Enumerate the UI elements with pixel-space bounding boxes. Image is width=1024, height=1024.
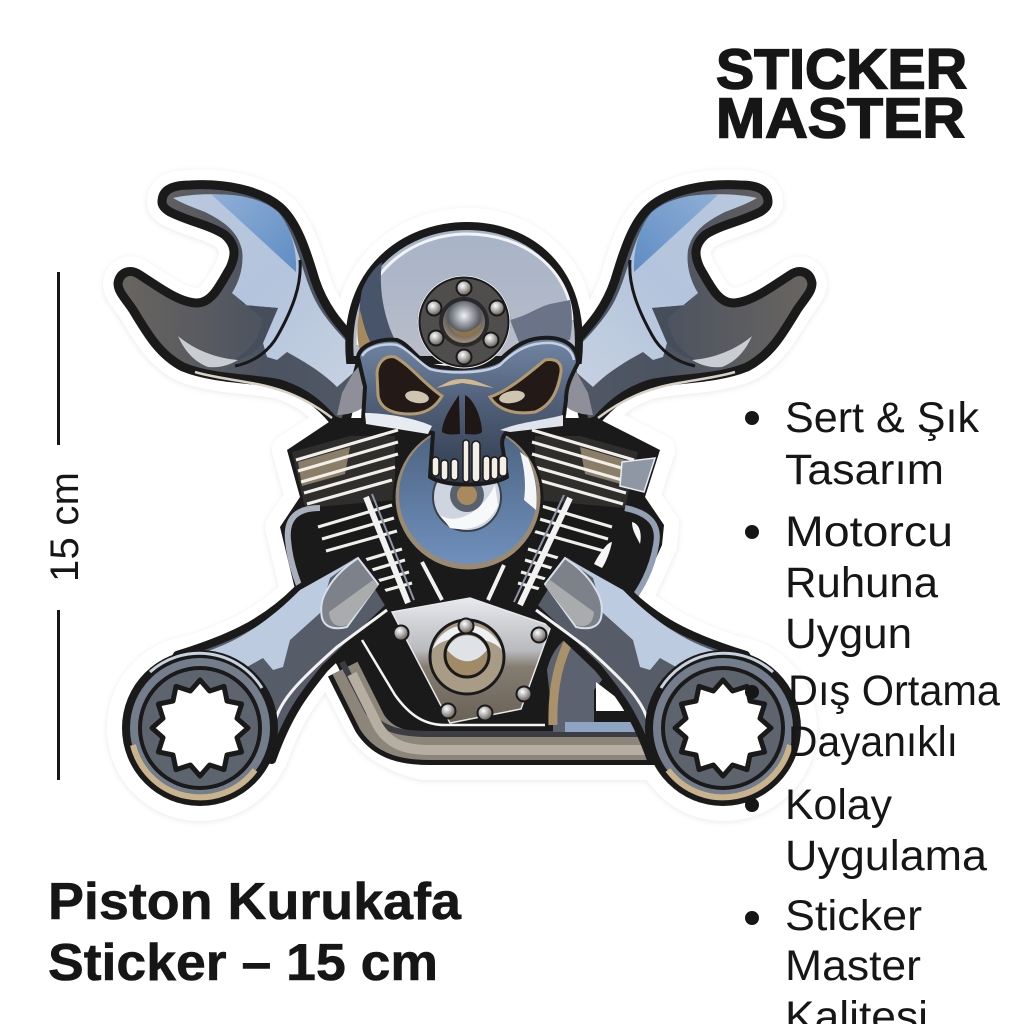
- wrench: lower right: [533, 552, 801, 806]
- eye glint right: [498, 389, 526, 405]
- eye socket left: [377, 357, 442, 414]
- skull: [349, 226, 579, 484]
- pushrod right: [488, 495, 570, 605]
- dome lower reflection: [510, 300, 572, 345]
- dome filler cap: [418, 276, 510, 368]
- skull dome: [349, 226, 579, 360]
- rocker box chrome right: [620, 458, 655, 492]
- lower blue pipe: [565, 722, 640, 732]
- bullet 4: Kolay: [785, 781, 892, 829]
- bullet 5: Sticker: [785, 892, 922, 940]
- product title: Piston Kurukafa: [48, 873, 462, 931]
- bullet 2: Ruhuna: [785, 559, 938, 607]
- white triangle cut-out: [596, 682, 634, 711]
- bullet 1: Sert & Şık: [785, 394, 979, 442]
- sticker die-cut white border: [118, 185, 812, 806]
- dome tan reflection: [357, 310, 372, 350]
- brow gold: [436, 379, 494, 388]
- nose cavity: [442, 395, 482, 434]
- bullet 2: Motorcu: [785, 508, 953, 556]
- bullet 4: [745, 781, 987, 880]
- cylinder fins left: [292, 430, 412, 598]
- cover bolts: [394, 618, 546, 720]
- exhaust pipes: [342, 640, 660, 750]
- dimension: height 15 cm: [43, 272, 87, 780]
- oil line left: [288, 508, 320, 605]
- centre timing disc: [394, 423, 542, 571]
- feature list: [745, 394, 1000, 1024]
- bullet 3: Dış Ortama: [788, 667, 1000, 715]
- dome highlight rim: [358, 234, 572, 345]
- bullet 2: [745, 508, 953, 658]
- pushrod left: [366, 494, 442, 603]
- product title: [48, 873, 462, 992]
- cheek chrome highlight right: [500, 415, 563, 432]
- timing cover circle: [430, 620, 504, 694]
- dome dark side: [359, 262, 395, 350]
- white cut highlights right: [594, 522, 641, 568]
- wrench: upper right: [565, 185, 812, 425]
- eye socket right: [490, 360, 561, 413]
- bullet 2: Uygun: [785, 610, 912, 658]
- bullet 4: Uygulama: [785, 832, 987, 880]
- rear exhaust curve: [547, 632, 650, 732]
- teeth: [432, 440, 507, 482]
- dimension: height 15 cm: 15 cm: [43, 472, 87, 582]
- bullet 3: [745, 667, 1000, 766]
- oil line right: [625, 508, 657, 600]
- bullet 5: Master: [785, 942, 921, 990]
- eye glint left: [404, 389, 430, 405]
- cheek chrome highlight left: [365, 413, 432, 434]
- bullet 5: [745, 892, 928, 1024]
- bullet 3: Dayanıklı: [788, 718, 958, 766]
- v-twin engine: [280, 418, 664, 763]
- skull face: [358, 338, 578, 484]
- bullet 1: Tasarım: [785, 446, 944, 494]
- brow chrome highlight: [362, 343, 574, 372]
- engine black base: [280, 418, 664, 763]
- cylinder fins right: [518, 430, 638, 598]
- wrench: upper left: [118, 185, 365, 425]
- brand logo: MASTER: [716, 86, 965, 150]
- gold pipe highlight: [553, 635, 572, 725]
- brand logo: STICKER: [716, 38, 967, 102]
- wrench: lower left: [122, 552, 390, 806]
- brand logo: [716, 38, 967, 150]
- bullet 1: [745, 394, 979, 494]
- product title: Sticker – 15 cm: [48, 934, 438, 992]
- cam cover: [392, 598, 551, 723]
